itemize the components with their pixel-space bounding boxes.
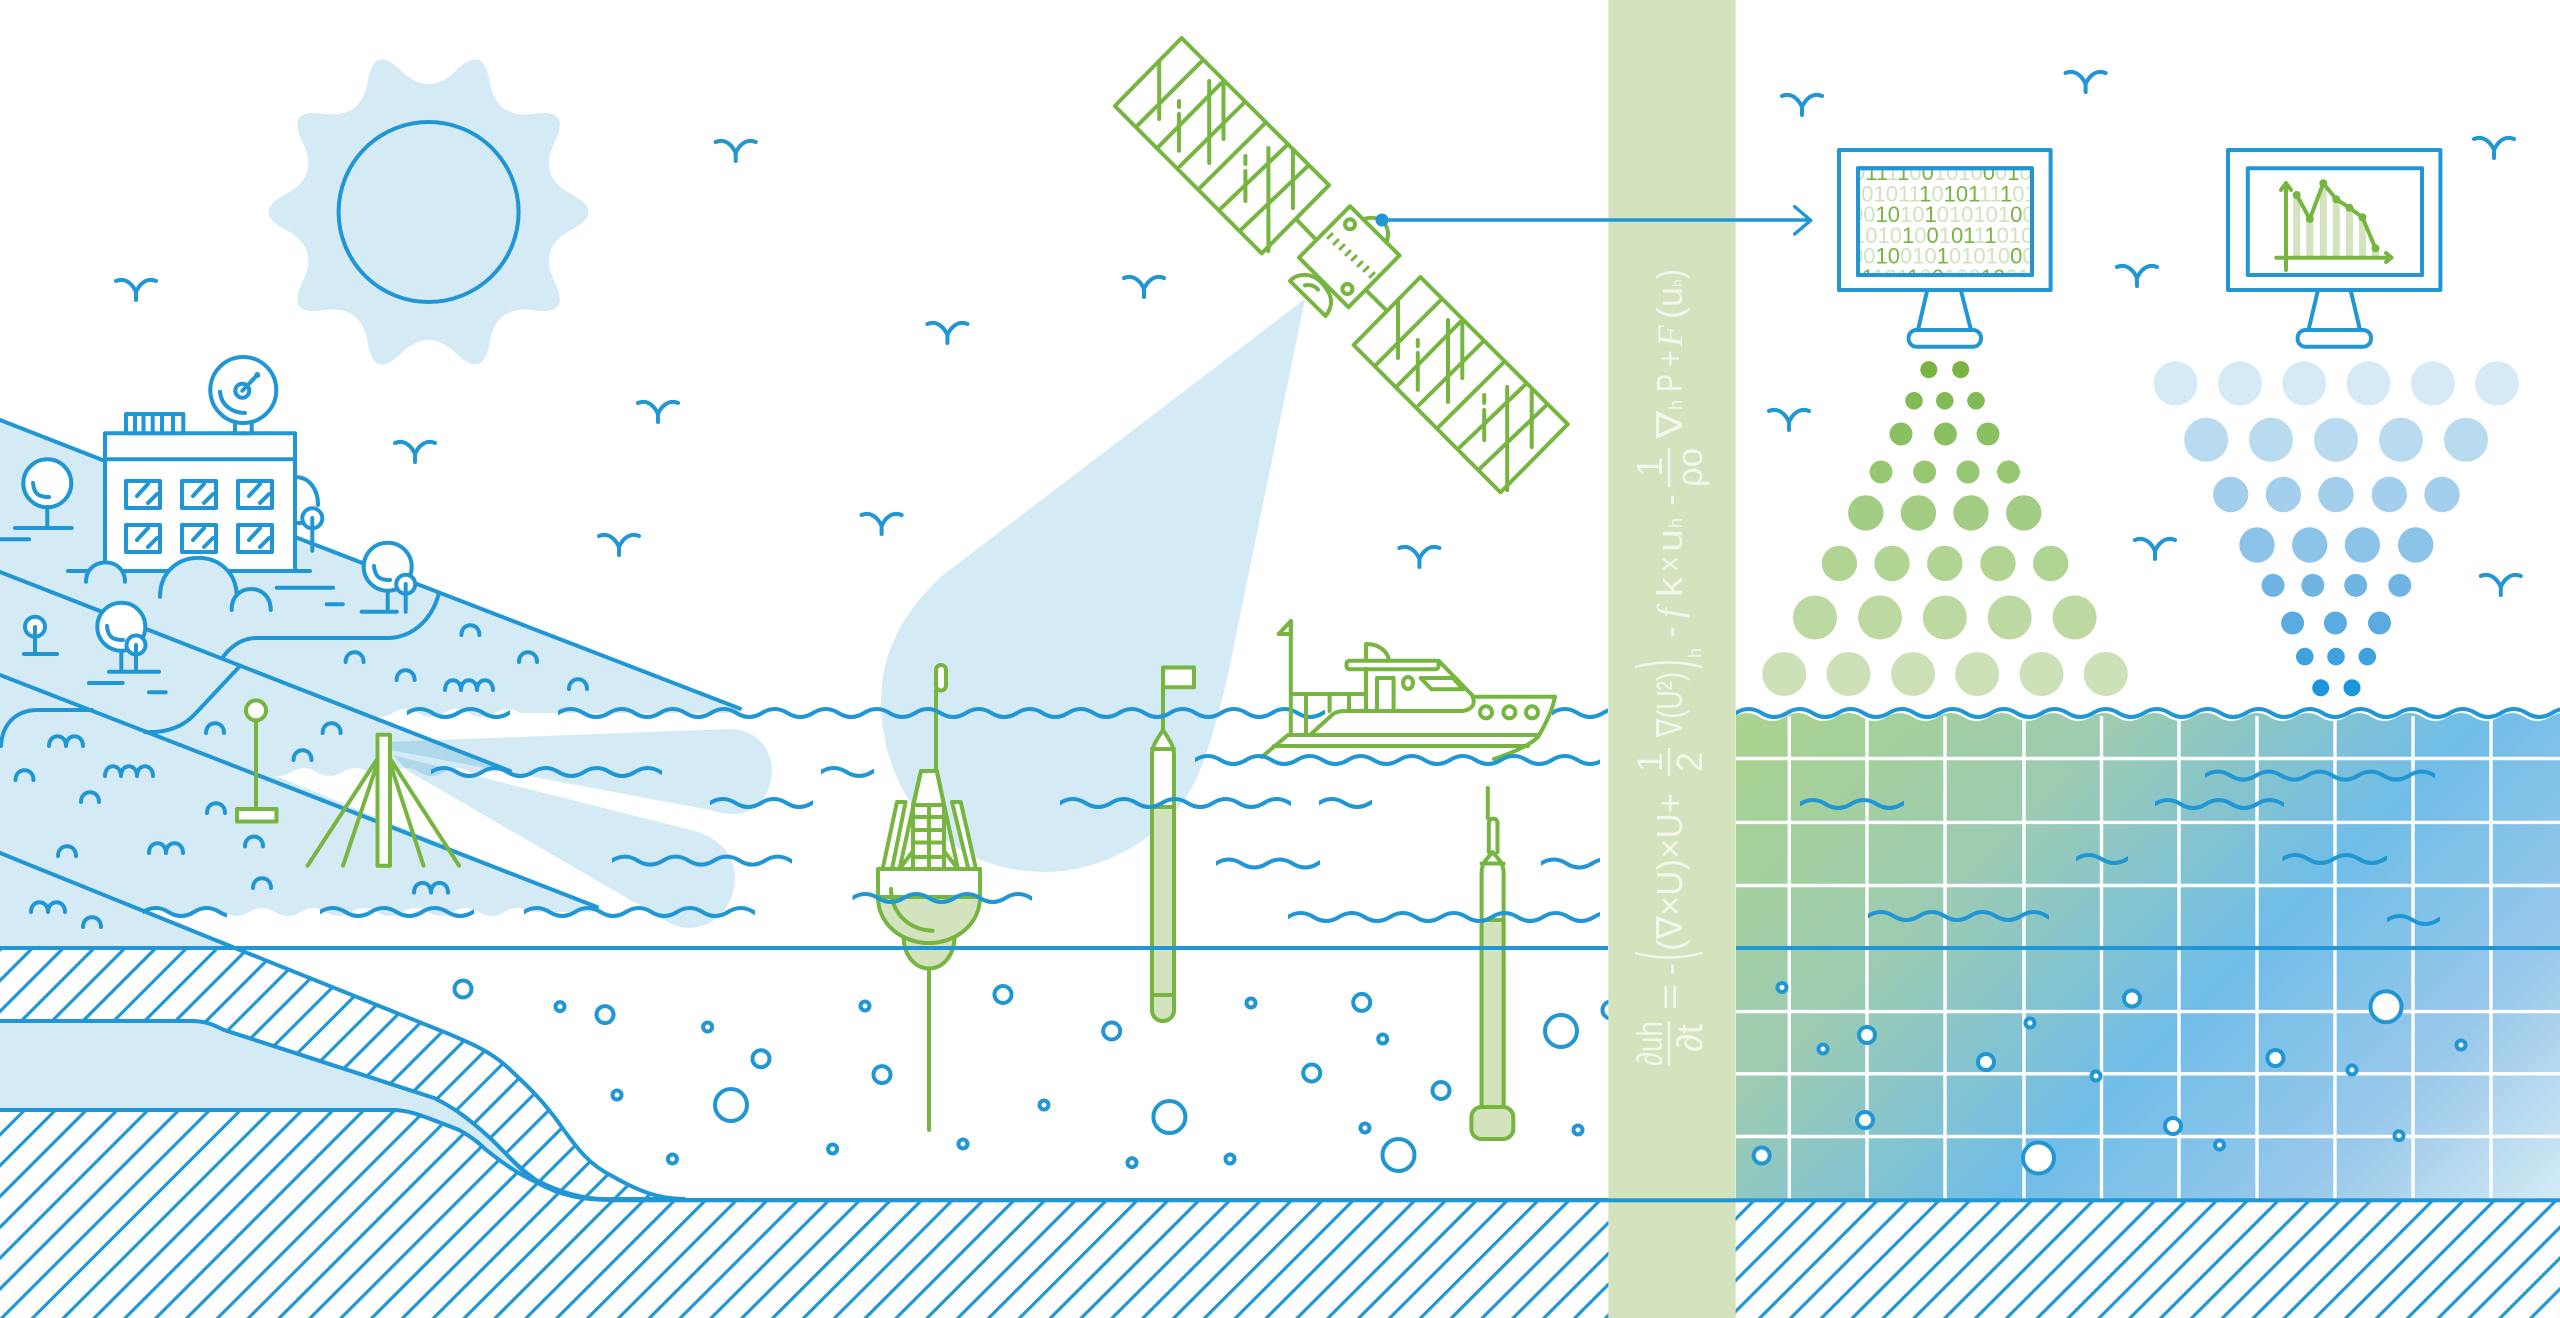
monitor with binary data: 101011101011110101 (1849, 182, 2061, 206)
data link arrow from satellite to monitor (1376, 207, 1811, 234)
equation: 1 (1629, 752, 1670, 772)
equation: 2 (1669, 752, 1710, 772)
equation: + (1649, 350, 1690, 367)
equation: - (1649, 494, 1690, 506)
equation: ∇ (1649, 410, 1690, 440)
radar beams from shore mast (383, 729, 772, 928)
equation: 1 (1629, 457, 1670, 477)
hill slope lines and roads (0, 420, 740, 948)
satellite swath beam (881, 299, 1305, 872)
equation: h (1666, 518, 1686, 528)
monitor with line chart (2228, 150, 2440, 347)
waves (143, 705, 2560, 928)
research vessel (1262, 621, 1555, 759)
seabed hatched layers (0, 948, 2560, 1318)
equation: ∂uh (1629, 1021, 1670, 1066)
equation column background (1608, 0, 1736, 1318)
monitor with binary data: 10101001011101010 (1853, 223, 2058, 248)
equation: F (1650, 324, 1690, 348)
coastal land fill (0, 420, 740, 948)
equation: ( (1649, 307, 1690, 319)
equation: u (1649, 287, 1690, 307)
equation: f (1650, 603, 1690, 618)
sun (269, 59, 589, 365)
gradient assimilation grid (1736, 705, 2560, 1200)
moored buoy (878, 665, 980, 1130)
equation: h (1685, 648, 1705, 658)
birds in the sky (116, 72, 2521, 595)
equation: h (1666, 400, 1686, 410)
monitor with binary data: 001001010101000010 (1851, 244, 2071, 268)
equation: (∇×U)×U+ (1649, 793, 1690, 951)
equation (1629, 269, 1710, 1066)
green dot pyramid (1762, 361, 2128, 696)
bubbles in assimilation grid (1754, 983, 2466, 1174)
equation: k (1649, 576, 1690, 597)
equation: = (1649, 984, 1690, 1010)
equation: u (1649, 529, 1690, 552)
monitor with binary data: 111011001001001010 (1851, 265, 2066, 290)
monitor with binary data: 001010101010100010 (1851, 202, 2071, 227)
equation: P (1649, 374, 1690, 392)
equation: - (1649, 626, 1690, 638)
equation: ) (1649, 269, 1690, 279)
institute building with radar dish (68, 357, 310, 610)
spar buoy with flag (1152, 668, 1194, 1021)
grass marks (16, 625, 587, 927)
satellite (1115, 38, 1568, 492)
monitor with binary data: 011110010100010101 (1853, 160, 2068, 185)
drifting profiler (1471, 788, 1513, 1139)
equation: ∇(U²) (1649, 672, 1690, 738)
seabed line across column (612, 1198, 2560, 1202)
wave in front of vessel (1195, 752, 1600, 768)
equation: - (1649, 963, 1690, 975)
bubbles in open water (454, 980, 1620, 1171)
blue dot funnel (2154, 361, 2519, 696)
equation: × (1649, 556, 1690, 572)
monitor with binary data (1839, 150, 2071, 347)
equation: h (1669, 279, 1685, 287)
trees and bush behind building (0, 459, 415, 692)
sea surface line and pycnocline line (0, 946, 2560, 950)
shore sensor pole (237, 700, 276, 822)
equation: ρo (1669, 448, 1710, 487)
shore radar mast (308, 735, 459, 866)
equation: ∂t (1669, 1024, 1710, 1052)
